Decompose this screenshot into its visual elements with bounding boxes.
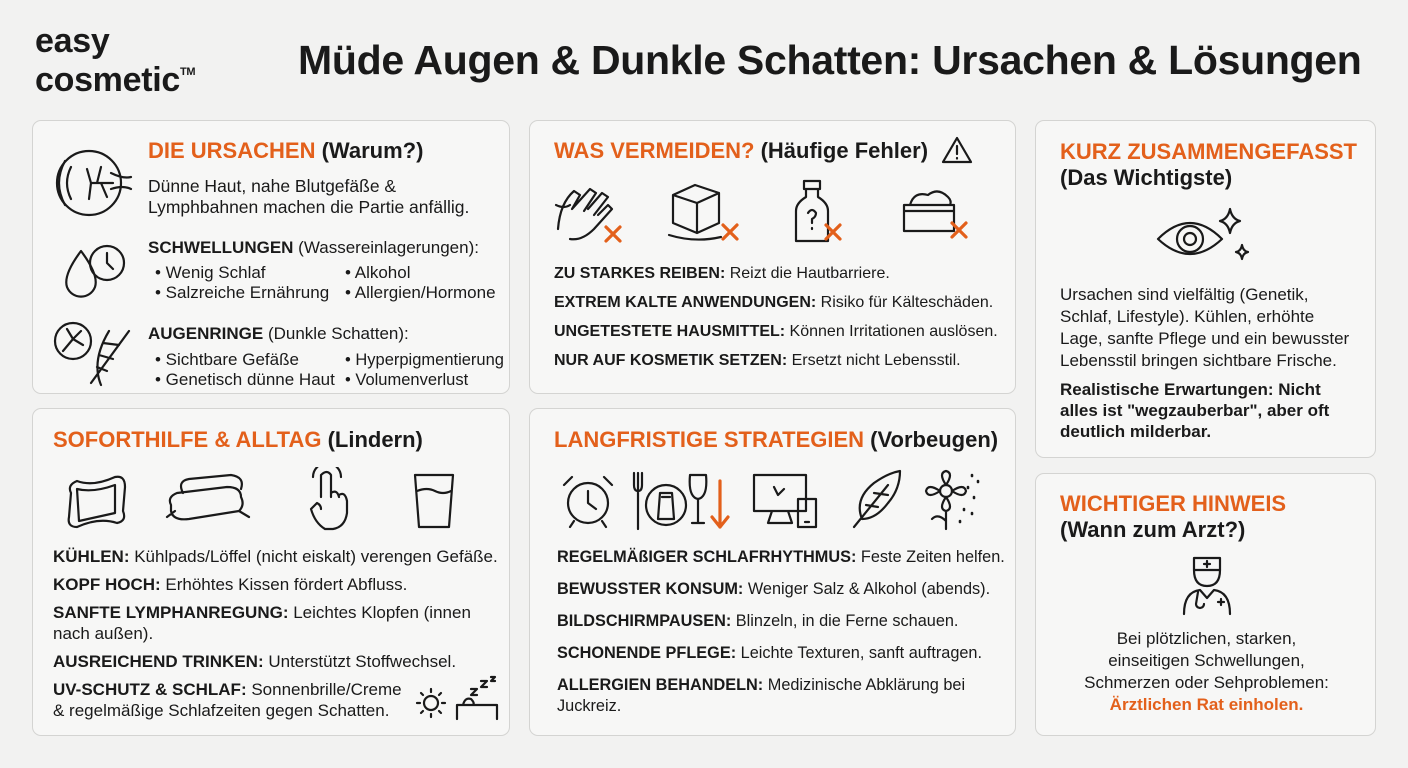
panel: summary bbox=[1035, 120, 1376, 458]
heading: SOFORTHILFE & ALLTAG (Lindern) bbox=[53, 427, 423, 452]
text summary: Schlaf, Lifestyle). Kühlen, erhöhte bbox=[1060, 307, 1314, 326]
panel: causes: • Alkohol bbox=[345, 263, 410, 282]
panel: causes: • Volumenverlust bbox=[345, 371, 468, 389]
heading bbox=[1060, 139, 1357, 190]
list bbox=[557, 548, 1005, 715]
heading bbox=[1060, 491, 1286, 542]
icon: feather bbox=[852, 470, 902, 528]
panel: avoid bbox=[529, 120, 1016, 394]
icon: alarm clock bbox=[562, 476, 614, 528]
icon: sun and sleep bbox=[416, 676, 498, 720]
heading: (Das Wichtigste) bbox=[1060, 165, 1232, 190]
icon: cool pad bbox=[68, 476, 126, 528]
heading: LANGFRISTIGE STRATEGIEN (Vorbeugen) bbox=[554, 427, 998, 452]
heading: KURZ ZUSAMMENGEFASST bbox=[1060, 139, 1357, 164]
panel: causes: • Sichtbare Gefäße bbox=[155, 350, 299, 369]
panel: causes: • Hyperpigmentierung bbox=[345, 351, 504, 369]
panel: causes: • Wenig Schlaf bbox=[155, 263, 266, 282]
icon: tapping finger bbox=[310, 467, 348, 530]
list bbox=[53, 547, 498, 720]
list: UV-SCHUTZ & SCHLAF: Sonnenbrille/Creme bbox=[53, 680, 402, 699]
list: ZU STARKES REIBEN: Reizt die Hautbarriere. bbox=[554, 265, 890, 282]
text note: Bei plötzlichen, starken, bbox=[1117, 629, 1296, 648]
list: ALLERGIEN BEHANDELN: Medizinische Abklärung bei bbox=[557, 676, 965, 694]
panel: causes: • Allergien/Hormone bbox=[345, 283, 496, 302]
text expectations: alles ist "wegzauberbar", aber oft bbox=[1060, 401, 1329, 420]
text note bbox=[1084, 629, 1329, 714]
heading: WAS VERMEIDEN? (Häufige Fehler) bbox=[554, 138, 928, 163]
heading: DIE URSACHEN (Warum?) bbox=[148, 138, 423, 163]
text summary: Lage, sanfte Pflege und ein bewusster bbox=[1060, 329, 1349, 348]
logo: cosmeticTM bbox=[35, 61, 195, 99]
text swellings: SCHWELLUNGEN (Wassereinlagerungen): bbox=[148, 238, 479, 257]
list: AUSREICHEND TRINKEN: Unterstützt Stoffwechsel. bbox=[53, 652, 456, 671]
list: KOPF HOCH: Erhöhtes Kissen fördert Abfluss. bbox=[53, 575, 407, 594]
text expectations: Realistische Erwartungen: Nicht bbox=[1060, 380, 1321, 399]
panel: important note bbox=[1035, 473, 1376, 736]
icon: warning bbox=[942, 136, 972, 164]
list: nach außen). bbox=[53, 624, 153, 643]
text expectations bbox=[1060, 380, 1330, 441]
logo: easy bbox=[35, 22, 109, 60]
text note: Ärztlichen Rat einholen. bbox=[1110, 695, 1303, 714]
list: SCHONENDE PFLEGE: Leichte Texturen, sanft auftragen. bbox=[557, 644, 982, 662]
icons row bbox=[562, 470, 980, 530]
icon: bottle bbox=[794, 180, 842, 242]
title: Müde Augen & Dunkle Schatten: Ursachen & Lösungen bbox=[298, 37, 1362, 83]
panel: immediate help bbox=[32, 408, 510, 736]
icon: doctor bbox=[1182, 556, 1232, 616]
text note: einseitigen Schwellungen, bbox=[1108, 651, 1305, 670]
icon: pillows bbox=[166, 474, 250, 520]
text dark circles: AUGENRINGE (Dunkle Schatten): bbox=[148, 324, 409, 343]
icon: plate salt wine arrow bbox=[632, 472, 730, 530]
list: NUR AUF KOSMETIK SETZEN: Ersetzt nicht Lebensstil. bbox=[554, 352, 961, 369]
panel: long-term strategies bbox=[529, 408, 1016, 736]
icon: ice cube bbox=[668, 184, 739, 241]
list: & regelmäßige Schlafzeiten gegen Schatten. bbox=[53, 701, 389, 720]
list: KÜHLEN: Kühlpads/Löffel (nicht eiskalt) verengen Gefäße. bbox=[53, 547, 498, 566]
list: Juckreiz. bbox=[557, 697, 621, 715]
icon: cream jar bbox=[902, 190, 968, 239]
heading: WICHTIGER HINWEIS bbox=[1060, 491, 1286, 516]
icon: vessels and dna bbox=[54, 322, 130, 386]
list: EXTREM KALTE ANWENDUNGEN: Risiko für Kälteschäden. bbox=[554, 294, 993, 311]
text intro: Lymphbahnen machen die Partie anfällig. bbox=[148, 197, 469, 217]
text intro bbox=[148, 176, 469, 217]
icon: eye anatomy bbox=[56, 150, 132, 216]
logo bbox=[35, 22, 195, 99]
icon: drop and clock bbox=[65, 244, 126, 298]
text summary: Ursachen sind vielfältig (Genetik, bbox=[1060, 285, 1309, 304]
text note: Schmerzen oder Sehproblemen: bbox=[1084, 673, 1329, 692]
icons row bbox=[68, 467, 454, 530]
text expectations: deutlich milderbar. bbox=[1060, 422, 1211, 441]
text summary: Lebensstil bringen sichtbare Frische. bbox=[1060, 351, 1337, 370]
text intro: Dünne Haut, nahe Blutgefäße & bbox=[148, 176, 396, 196]
list: SANFTE LYMPHANREGUNG: Leichtes Klopfen (innen bbox=[53, 603, 471, 622]
icons row bbox=[554, 180, 968, 243]
icon: glass of water bbox=[414, 474, 454, 528]
list: UNGETESTETE HAUSMITTEL: Können Irritationen auslösen. bbox=[554, 323, 998, 340]
list bbox=[554, 265, 998, 369]
panel: causes bbox=[32, 120, 510, 394]
panel: causes: • Genetisch dünne Haut bbox=[155, 370, 335, 389]
list: BILDSCHIRMPAUSEN: Blinzeln, in die Ferne schauen. bbox=[557, 612, 958, 630]
icon: screens bbox=[752, 474, 818, 528]
heading: (Wann zum Arzt?) bbox=[1060, 517, 1245, 542]
list: REGELMÄßIGER SCHLAFRHYTHMUS: Feste Zeiten helfen. bbox=[557, 548, 1005, 566]
icon: rubbing hand bbox=[554, 188, 622, 243]
icon: flower sparkles bbox=[924, 470, 980, 530]
panel: causes: • Salzreiche Ernährung bbox=[155, 283, 329, 302]
list: BEWUSSTER KONSUM: Weniger Salz & Alkohol (abends). bbox=[557, 580, 990, 598]
icon: eye sparkle bbox=[1156, 208, 1250, 260]
text summary bbox=[1060, 285, 1349, 370]
